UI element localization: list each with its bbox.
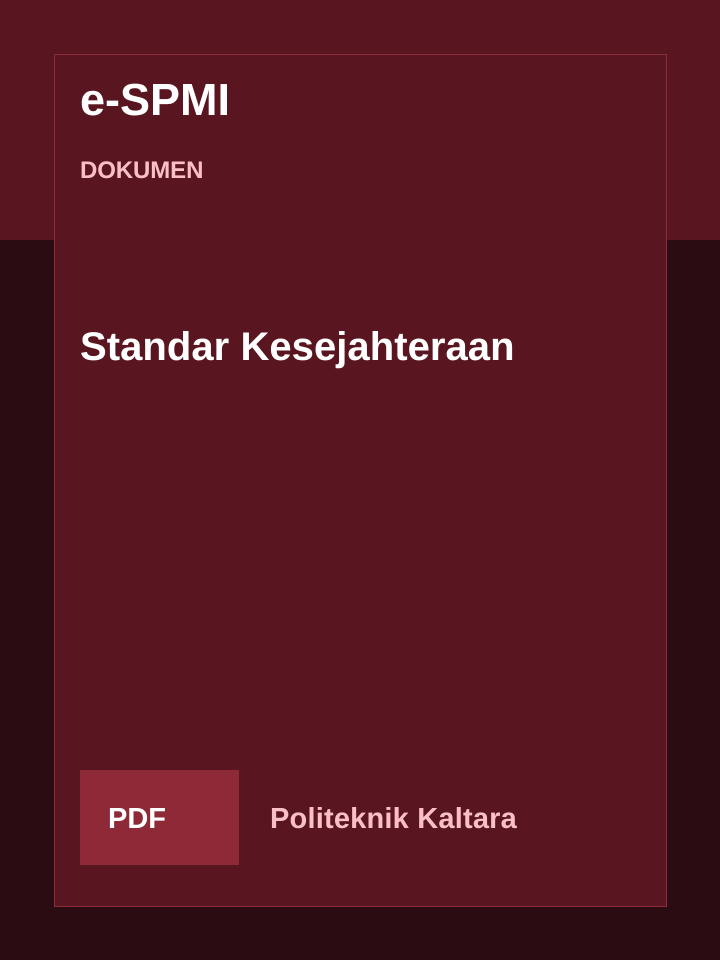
panel: document card <box>54 54 667 907</box>
header band <box>0 0 720 240</box>
badge text: PDF <box>108 803 166 835</box>
institution name: Politeknik Kaltara <box>270 803 517 835</box>
title: e-SPMI: e-SPMI <box>80 74 230 125</box>
badge: PDF <box>80 770 239 865</box>
heading: Standar Kesejahteraan: Standar Kesejahteraan <box>80 325 515 369</box>
label: DOKUMEN: DOKUMEN <box>80 157 203 184</box>
